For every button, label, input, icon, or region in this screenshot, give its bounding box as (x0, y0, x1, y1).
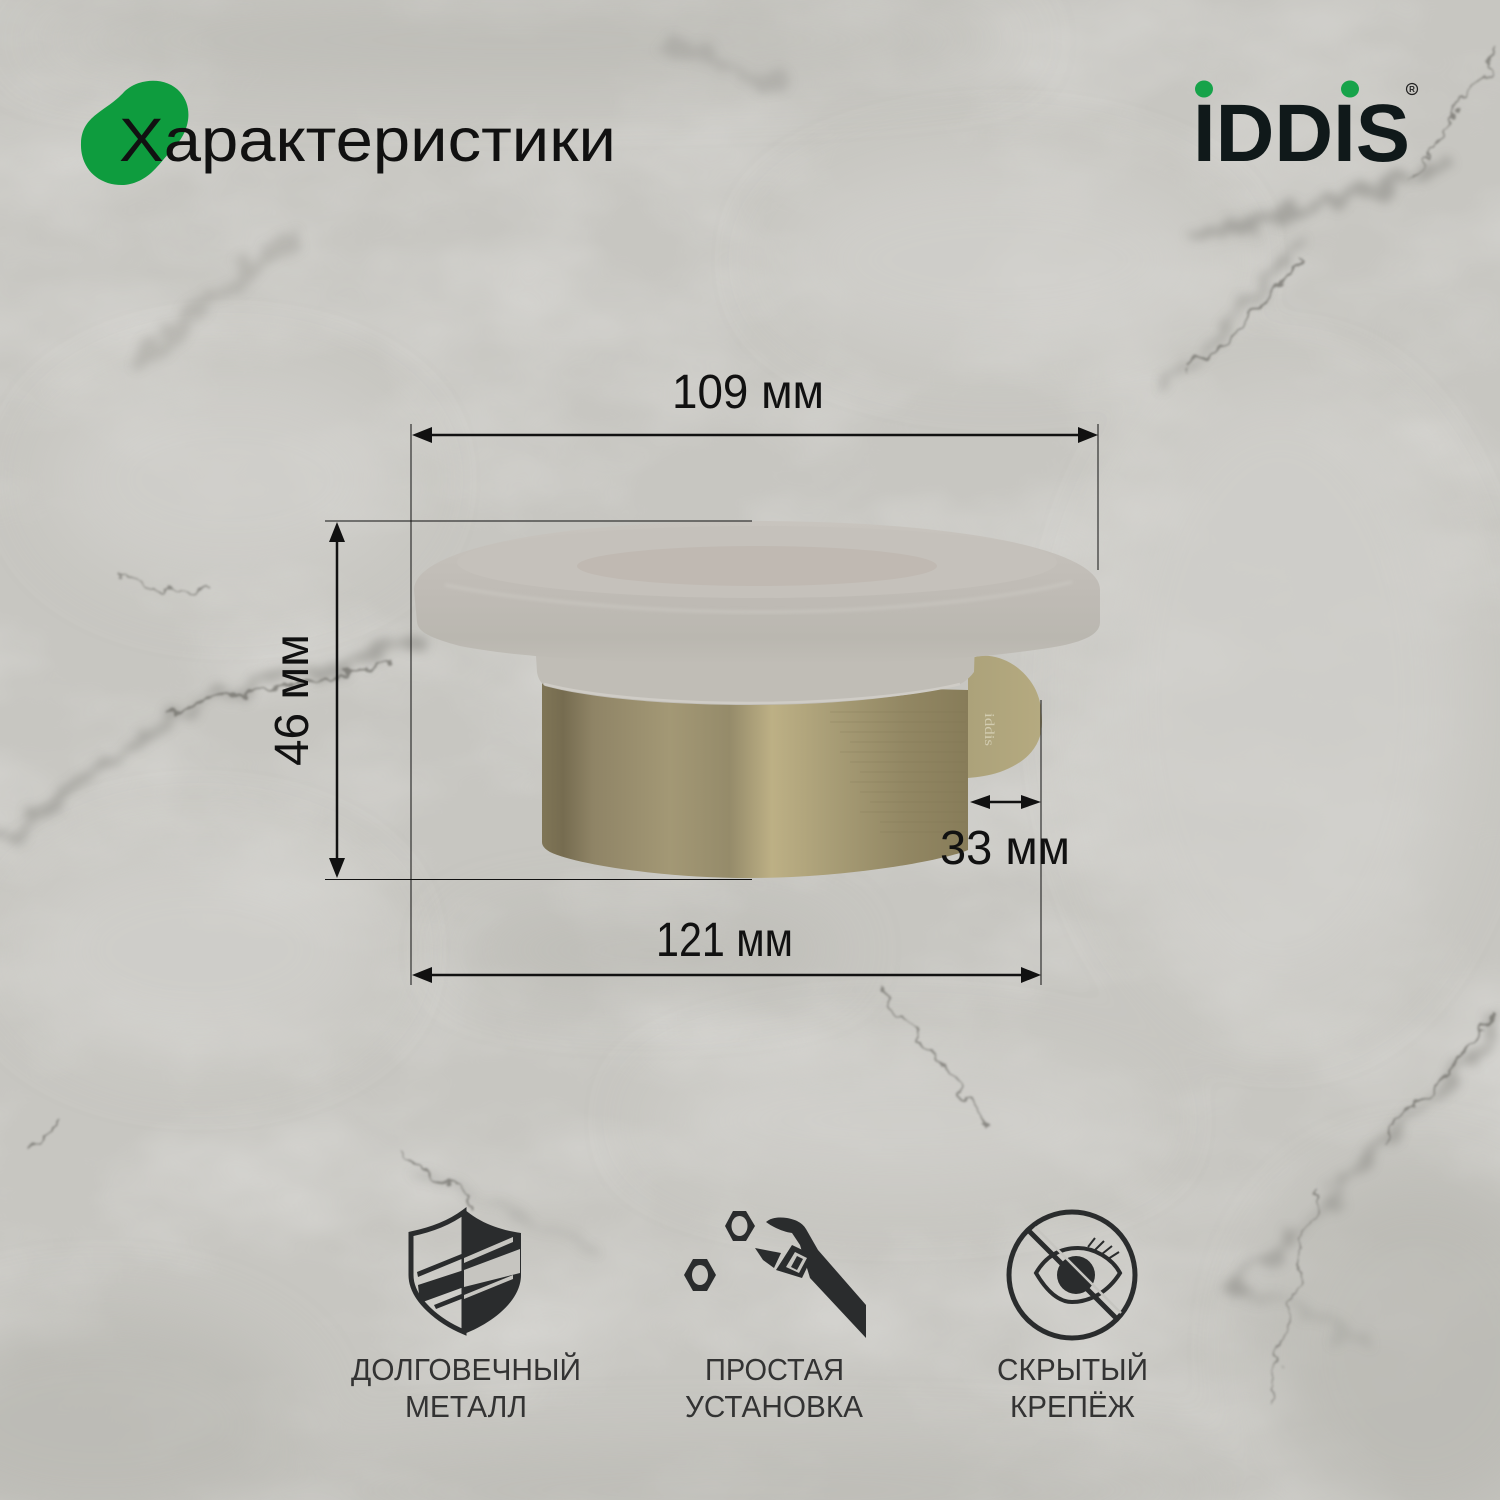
label: 46 mm: 46 мм (266, 634, 319, 766)
arrow: width 109 mm (412, 427, 1098, 443)
frosted glass dish (414, 521, 1100, 705)
text: durable metal: МЕТАЛЛ (405, 1389, 527, 1424)
text: hidden fastening: КРЕПЁЖ (1010, 1389, 1135, 1424)
icon: crossed-out eye (1009, 1212, 1135, 1338)
text: durable metal (351, 1351, 581, 1424)
text: easy installation: УСТАНОВКА (685, 1389, 863, 1424)
text: durable metal: ДОЛГОВЕЧНЫЙ (351, 1351, 581, 1387)
label: 121 mm: 121 мм (656, 914, 793, 967)
product: soap dish (414, 521, 1100, 878)
logo: IDDIS: IDDIS (1193, 88, 1410, 179)
label: 33 mm: 33 мм (940, 822, 1070, 875)
green blob (81, 81, 188, 185)
text: easy installation (685, 1352, 863, 1424)
dimension lines (325, 424, 1098, 985)
feature: durable metal (351, 1209, 581, 1424)
arrow: height 46 mm (329, 522, 345, 878)
feature: easy installation (684, 1211, 866, 1424)
heading (81, 81, 616, 185)
icon: wrench and nuts (684, 1211, 866, 1338)
wall mount (968, 656, 1042, 778)
heading text: Характеристики (119, 106, 616, 174)
label: 109 mm: 109 мм (672, 366, 824, 419)
text: hidden fastening (997, 1351, 1148, 1424)
arrow: depth 33 mm (970, 795, 1041, 809)
brushed gold holder (542, 680, 968, 878)
arrow: length 121 mm (412, 967, 1041, 983)
icon: shield (411, 1209, 521, 1334)
text: easy installation: ПРОСТАЯ (705, 1352, 844, 1387)
text: hidden fastening: СКРЫТЫЙ (997, 1351, 1148, 1387)
wall mount: iddis (981, 713, 996, 746)
feature: hidden fastening (997, 1212, 1148, 1424)
logo: IDDIS: R (1409, 85, 1415, 94)
